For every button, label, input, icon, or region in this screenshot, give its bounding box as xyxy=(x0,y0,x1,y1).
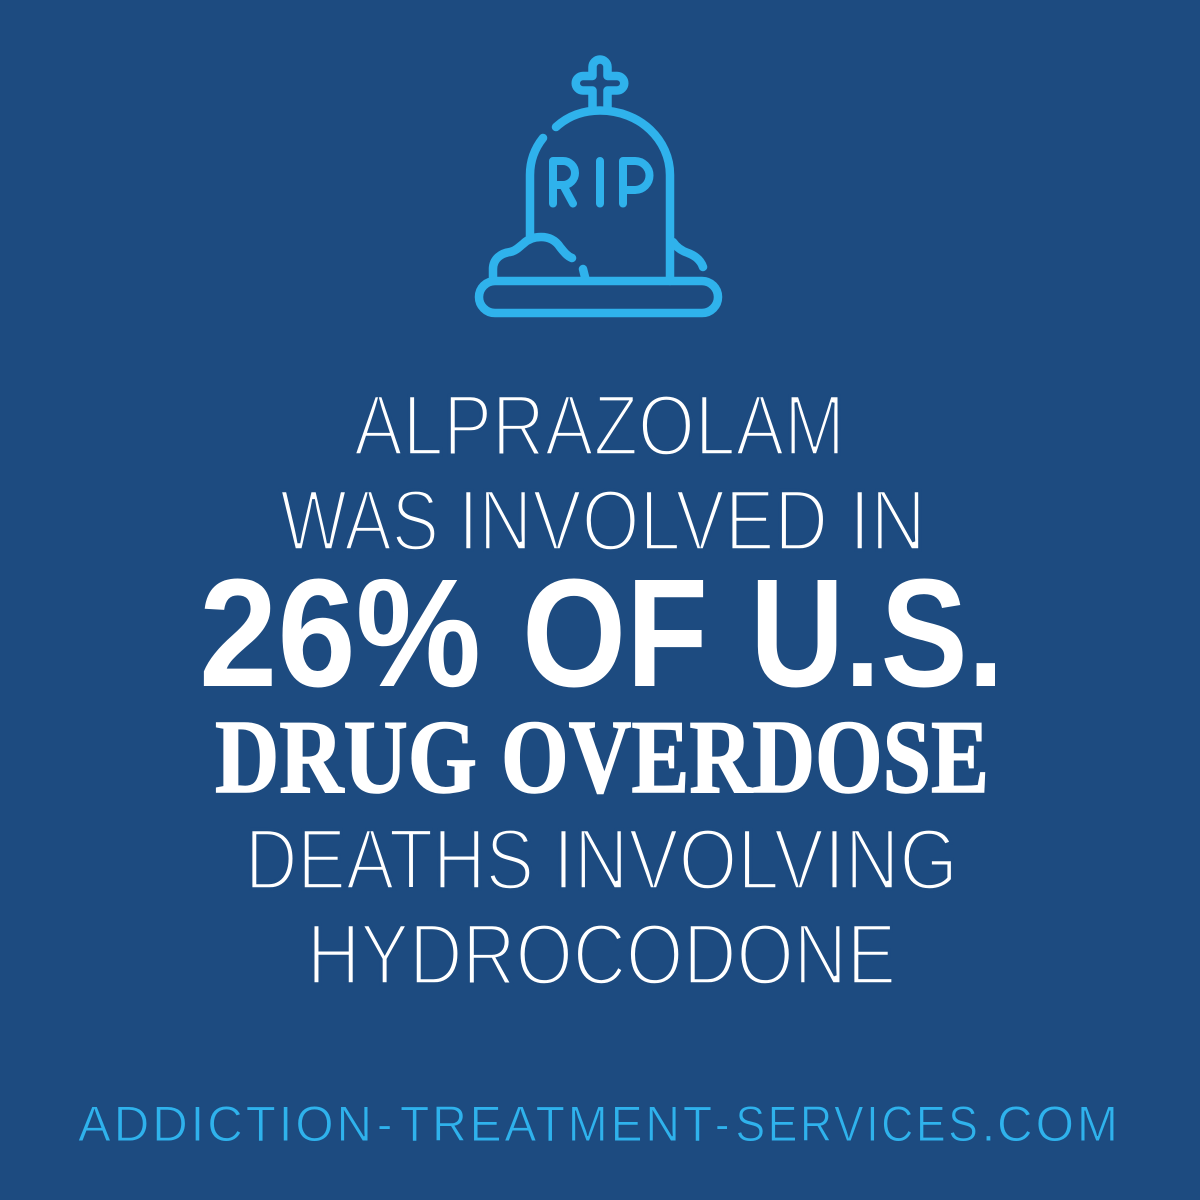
text: 26% OF U.S. xyxy=(199,547,1004,719)
icon: soil mounds xyxy=(493,237,703,277)
text: website footer: COM xyxy=(997,1096,1121,1152)
text: DEATHS INVOLVING: DEATHS xyxy=(245,812,534,908)
text: 26% OF U.S.: 26% xyxy=(199,547,481,719)
icon: ground base xyxy=(479,281,718,313)
icon: gravestone with RIP xyxy=(479,60,718,313)
text: 26% OF U.S.: OF xyxy=(522,547,708,719)
text: DRUG OVERDOSE: DRUG xyxy=(215,698,477,815)
icon: cross xyxy=(576,60,624,110)
text: website footer xyxy=(78,1096,1121,1152)
text: HYDROCODONE: HYDROCODONE xyxy=(307,907,896,1003)
text: DEATHS INVOLVING: INVOLVING xyxy=(553,812,958,908)
text: website footer: SERVICES xyxy=(736,1096,980,1152)
text: WAS INVOLVED IN: IN xyxy=(849,473,926,569)
text: 26% OF U.S.: U.S. xyxy=(750,547,1004,719)
text: DRUG OVERDOSE xyxy=(215,698,989,815)
icon: headstone xyxy=(530,110,670,281)
text: website footer: - xyxy=(715,1096,732,1152)
text: website footer: . xyxy=(982,1096,998,1152)
text: DEATHS INVOLVING xyxy=(245,812,958,908)
icon: RIP lettering xyxy=(553,161,650,204)
text: WAS INVOLVED IN: INVOLVED xyxy=(458,473,828,569)
text: DRUG OVERDOSE: OVERDOSE xyxy=(501,698,989,815)
text: website footer: TREATMENT xyxy=(400,1096,715,1152)
text: WAS INVOLVED IN xyxy=(280,473,926,569)
text: WAS INVOLVED IN: WAS xyxy=(280,473,439,569)
text: website footer: - xyxy=(377,1096,395,1152)
text: ALPRAZOLAM: ALPRAZOLAM xyxy=(354,378,845,474)
text: website footer: ADDICTION xyxy=(78,1096,375,1152)
